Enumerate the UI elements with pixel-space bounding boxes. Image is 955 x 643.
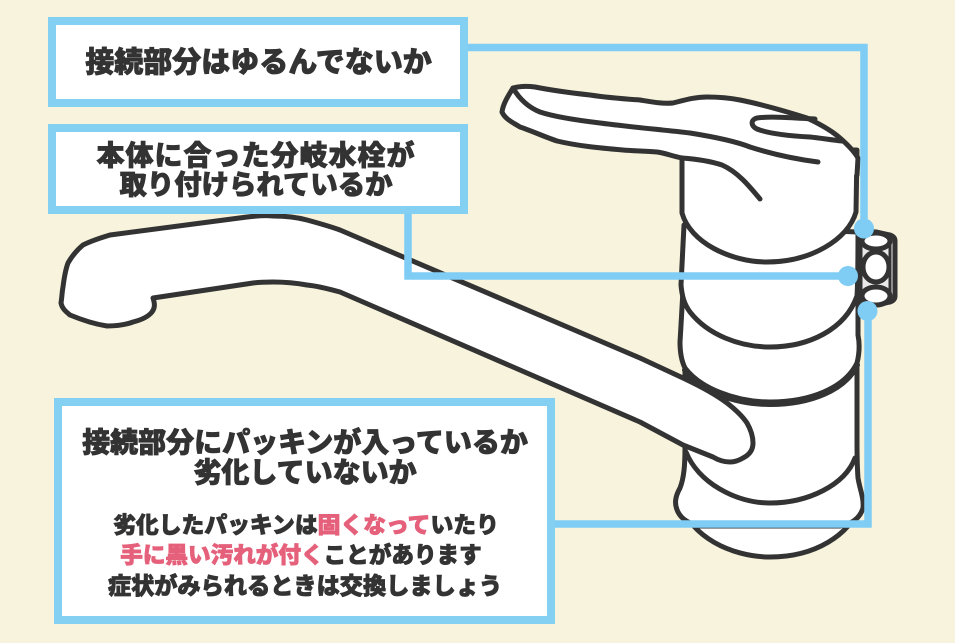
connector line: box 2 to middle joint bbox=[408, 214, 848, 276]
icon: faucet lower body bbox=[676, 360, 863, 526]
icon: lever underside bbox=[682, 158, 760, 199]
text block: packing explanation: 症状がみられるときは交換しましょう bbox=[108, 573, 502, 599]
panel: matching faucet bbox=[52, 128, 464, 210]
icon: spout bbox=[61, 216, 753, 462]
icon: faucet upper section bbox=[681, 225, 858, 347]
connector lines and dots bbox=[408, 48, 878, 524]
icon: lever inner line bbox=[513, 88, 818, 162]
icon: faucet lever handle bbox=[502, 86, 858, 175]
connector line: box 3 to lower joint bbox=[555, 311, 868, 524]
heading: packing check: 接続部分にパッキンが入っているか bbox=[82, 426, 528, 458]
icon: faucet middle section bbox=[680, 290, 859, 402]
dot: upper joint bbox=[854, 218, 874, 238]
faucet illustration bbox=[61, 86, 895, 557]
dot: lower joint bbox=[858, 301, 878, 321]
panel: packing check bbox=[58, 402, 551, 620]
icon: lever slot bbox=[752, 117, 842, 141]
icon: faucet lower body ring bbox=[686, 452, 855, 503]
connector line: box 1 to upper joint bbox=[468, 48, 864, 228]
text block: packing explanation: 劣化したパッキンは固くなっていたり bbox=[113, 512, 499, 538]
dot: middle joint bbox=[838, 266, 858, 286]
heading: matching faucet: 本体に合った分岐水栓が bbox=[96, 139, 416, 171]
icon: faucet cap bbox=[682, 150, 857, 262]
icon: faucet base bbox=[682, 505, 860, 557]
heading: packing check: 劣化していないか bbox=[193, 457, 417, 488]
icon: connector fitting bbox=[860, 232, 895, 306]
text block: packing explanation: 手に黒い汚れが付くことがあります bbox=[120, 543, 482, 568]
heading: connection looseness: 接続部分はゆるんでないか bbox=[85, 46, 432, 79]
heading: matching faucet: 取り付けられているか bbox=[119, 169, 393, 200]
panel: connection looseness bbox=[52, 21, 464, 103]
